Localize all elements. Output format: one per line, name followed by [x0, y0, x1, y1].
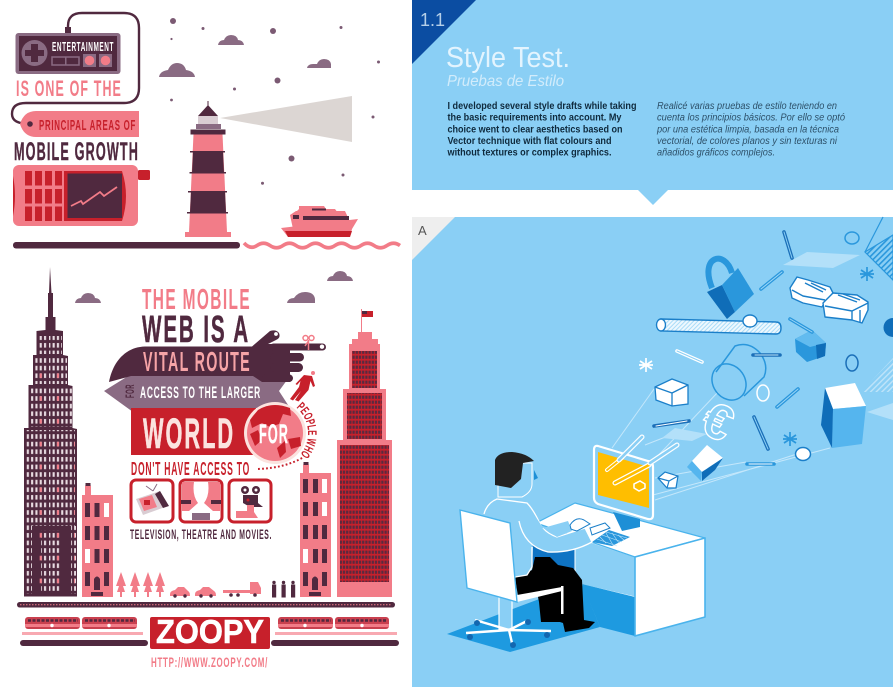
icon: pointing hand and swoosh [109, 330, 326, 382]
banner: world: WORLD [143, 410, 235, 458]
icon: hatched tube with coin [656, 315, 781, 334]
text: people who, curved: PEOPLE WHO [296, 402, 317, 458]
banner: world [131, 408, 256, 458]
flat paper shapes [662, 252, 860, 441]
icon: keyboard [592, 530, 630, 546]
panel: left poster [10, 12, 401, 670]
icon: game controller: ENTERTAINMENT [52, 39, 114, 54]
person at desk [484, 452, 610, 632]
icon: office chair [460, 510, 564, 648]
icon: polyhedron [795, 330, 826, 362]
trains, right [271, 617, 399, 646]
shirt [484, 497, 533, 577]
english body text: Vector technique with flat colours and [448, 136, 612, 147]
icon: globe with for [244, 402, 306, 464]
icon: theatre curtains [180, 480, 222, 522]
icon: dark cube [687, 445, 723, 481]
icon: game controller [16, 27, 120, 74]
logo: zoopy: ZOOPY [156, 613, 264, 650]
railway track [17, 602, 395, 608]
clouds [75, 35, 353, 303]
stars [170, 18, 380, 185]
icon: cylinder outline [705, 345, 766, 407]
icon: cruise ship [281, 206, 358, 237]
icon: dollar signs [790, 277, 868, 323]
icon: tall box [821, 383, 866, 448]
arm outline [519, 521, 592, 552]
hair [495, 452, 534, 488]
panel: left poster: FOR [123, 384, 137, 398]
panel: left poster: ACCESS TO THE LARGER [140, 383, 261, 402]
tag: principal areas of [20, 111, 139, 137]
spanish body text: Realicé varias pruebas de estilo teniendo en [657, 101, 837, 112]
icon: desk [530, 503, 705, 636]
street: cars [170, 587, 216, 598]
english body text: without textures or complex graphics. [447, 148, 612, 159]
section number: 1.1 [420, 10, 445, 30]
forearm with cuff [519, 505, 592, 552]
nose [534, 470, 538, 480]
subtitle: Pruebas de Estilo [447, 73, 564, 90]
panel: style test header [412, 0, 893, 205]
asterisks [639, 267, 874, 446]
lighthouse light beam [220, 96, 352, 142]
corner tab [412, 217, 455, 260]
english body text: the basic requirements into account. My [448, 113, 622, 124]
spanish body text: cuenta los principios básicos. Por ello se optó [657, 113, 845, 124]
panel: left poster: DON'T HAVE ACCESS TO [131, 459, 250, 479]
face [498, 463, 532, 497]
icon: lighthouse [185, 101, 231, 237]
text: vital route: VITAL ROUTE [143, 346, 251, 377]
building: empire state tower [24, 267, 77, 596]
icon: white cube [655, 379, 688, 406]
arrow: pale route arrow [104, 373, 290, 412]
spanish body text: por una estética limpia, basada en la técnica [656, 124, 839, 135]
icon: game controller cord [12, 13, 139, 124]
header background with pointer [412, 0, 893, 205]
heading: the mobile: THE MOBILE [142, 284, 251, 316]
spanish body text: añadidos gráficos complejos. [657, 148, 775, 159]
legs [515, 557, 595, 632]
panel: desk illustration [412, 217, 893, 687]
english body text [447, 101, 636, 159]
icon: ribbon bow on finger [303, 336, 314, 350]
icon: mobile phone with growth chart [13, 165, 150, 226]
title: Style Test. [446, 42, 570, 74]
waves [244, 243, 400, 248]
icon: monitor [594, 437, 677, 531]
building: left apartment block [82, 483, 113, 597]
panel: left poster: TELEVISION, THEATRE AND MOVIES. [130, 526, 272, 542]
coins [757, 232, 859, 460]
street: truck [223, 582, 261, 597]
panel letter: A [418, 223, 427, 238]
floor mat [447, 583, 600, 652]
illustration background [412, 217, 893, 687]
right edge shapes [861, 217, 893, 420]
spanish body text: vectorial, de colores planos y sin texturas ni [657, 136, 838, 147]
ground bar [13, 242, 240, 248]
trains, left [20, 617, 148, 646]
heading: web is a: WEB IS A [142, 309, 250, 351]
tag: principal areas of: PRINCIPAL AREAS OF [39, 118, 136, 134]
icon: movie camera [229, 480, 271, 522]
sticks [654, 232, 812, 464]
heading: mobile growth: MOBILE GROWTH [14, 138, 139, 166]
spanish body text [656, 101, 845, 159]
english body text: I developed several style drafts while taking [448, 101, 636, 112]
icon: walking man [290, 371, 315, 402]
hand [570, 519, 610, 535]
english body text: choice went to clear aesthetics based on [448, 124, 622, 135]
icon: euro sign: € [693, 390, 742, 453]
text: url: HTTP://WWW.ZOOPY.COM/ [151, 654, 268, 670]
street: pedestrians [272, 581, 295, 598]
icon: globe with for: FOR [259, 419, 289, 449]
dotted connector [258, 457, 304, 469]
section corner tab [412, 0, 476, 64]
light rays from monitor [612, 389, 830, 500]
building: right apartment block [300, 462, 331, 597]
icon: television [131, 480, 173, 522]
street: trees [116, 572, 165, 597]
icon: padlock [707, 259, 754, 319]
cuff panel [543, 521, 572, 537]
heading: is one of the: IS ONE OF THE [16, 76, 122, 101]
shirt outline [484, 499, 542, 577]
icon: tiny cube [658, 472, 678, 488]
building: red skyscraper with flag [337, 309, 392, 597]
